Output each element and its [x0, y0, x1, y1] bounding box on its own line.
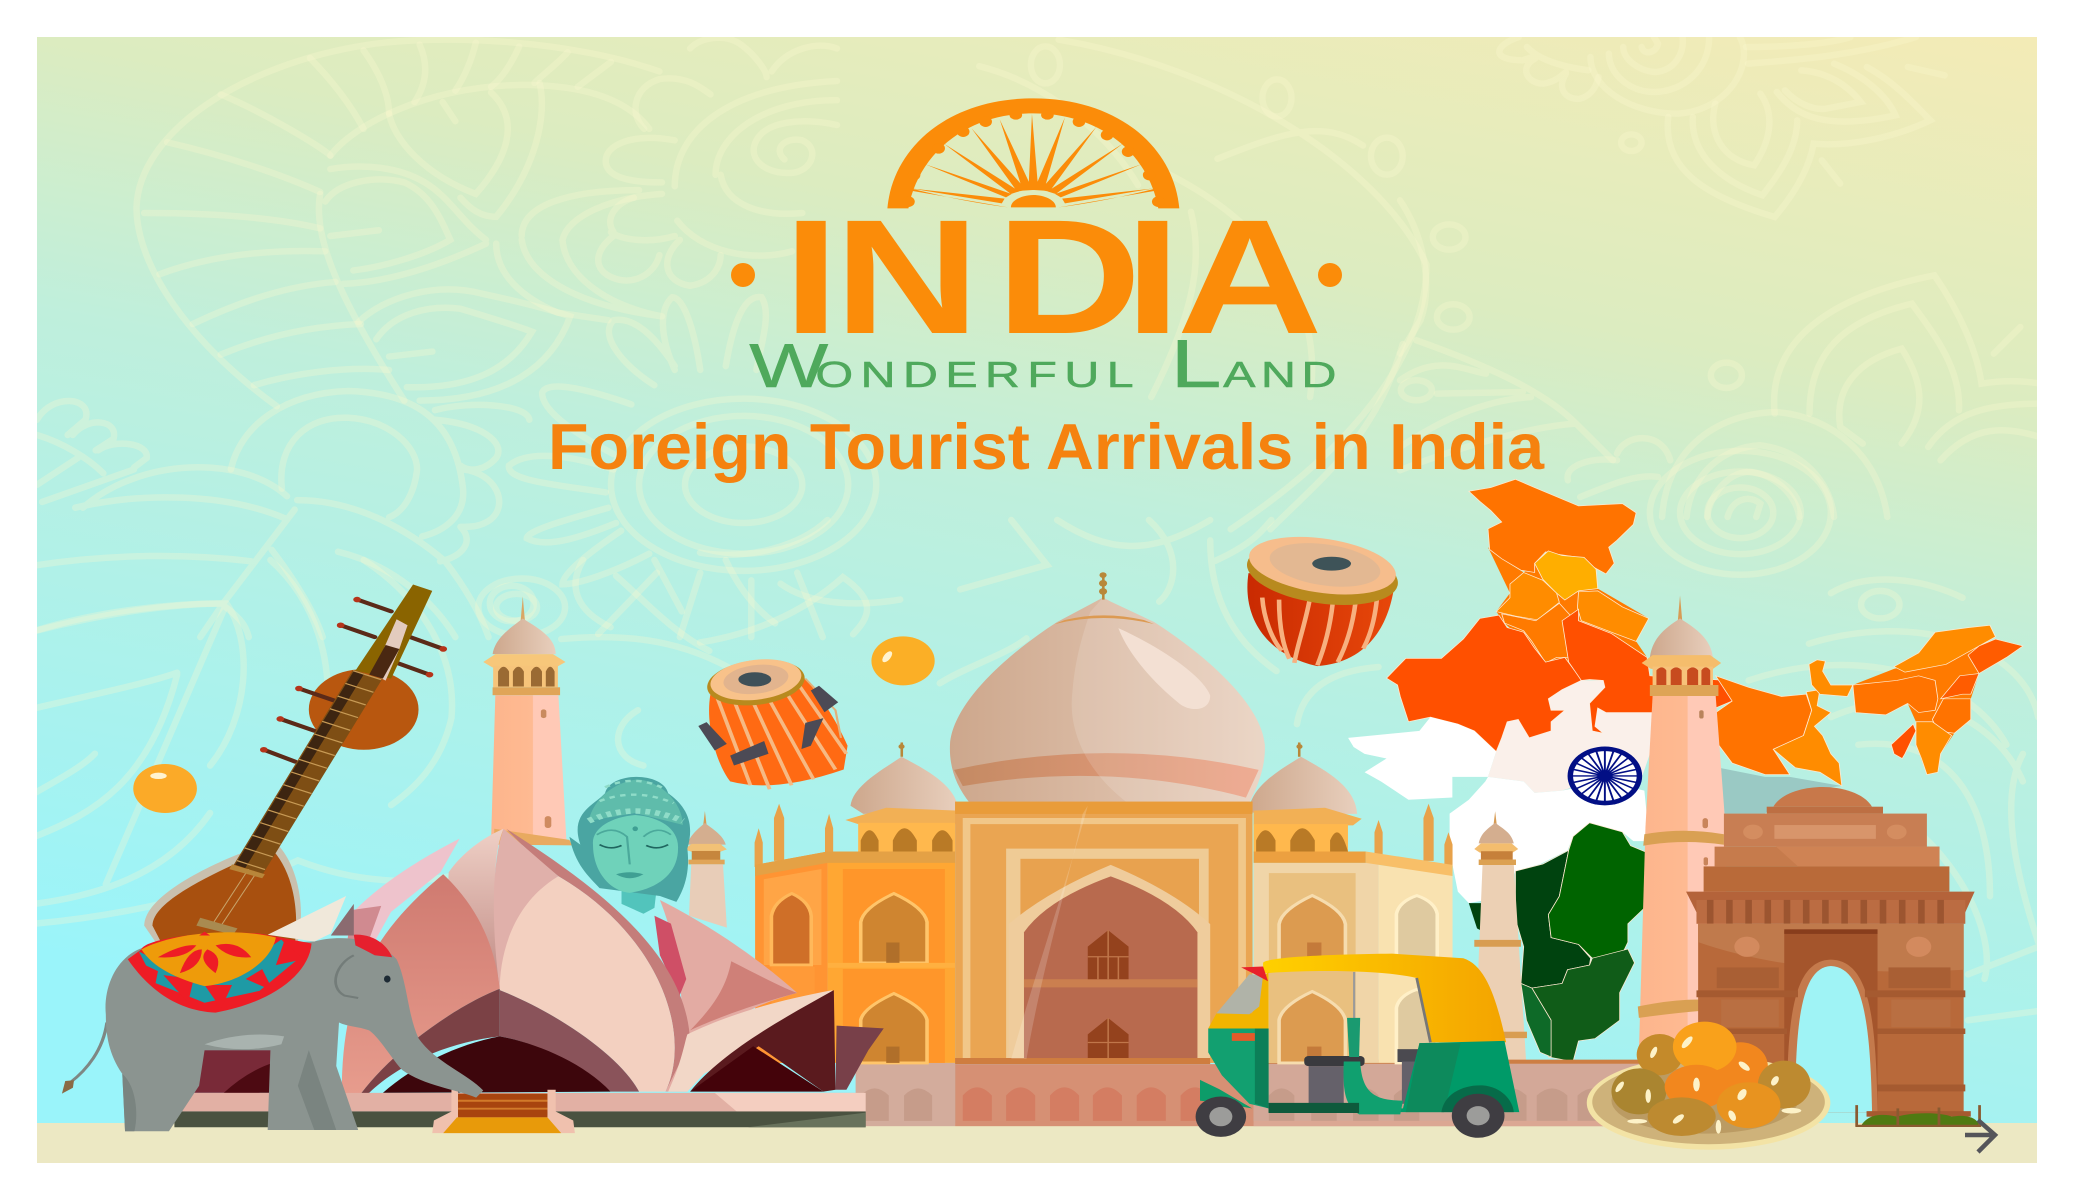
gate: main body [1696, 924, 1965, 1112]
lotus: stairway [432, 1090, 575, 1133]
Taj: main dome [950, 572, 1265, 804]
sweet ball left [133, 764, 197, 813]
left bowl: sitar [144, 585, 443, 941]
sitar: headstock [355, 585, 432, 681]
logo: tagline: ONDERFUL [815, 355, 1141, 395]
Taj: right small dome [1248, 742, 1362, 853]
mandala: top left [37, 38, 876, 637]
rickshaw: canopy [1263, 954, 1506, 1042]
small minaret behind lotus [684, 811, 727, 928]
lotus: pink inner [654, 916, 686, 997]
lotus: left hidden hall [194, 1050, 276, 1093]
flag chakra on map [1568, 747, 1642, 805]
logo: INDIA wordmark: INDIA [783, 186, 1323, 368]
elephant: ear and eye [336, 955, 391, 998]
Taj: left small dome [845, 742, 959, 852]
laddus [1611, 1022, 1811, 1136]
sitar: upper gourd [309, 669, 419, 750]
elephant: belly highlight [205, 1035, 284, 1049]
gate: base and grass [1856, 1105, 1981, 1127]
elephant: body [105, 938, 483, 1131]
logo: right dot [1318, 263, 1342, 287]
logo: chakra arch [887, 98, 1179, 208]
logo: tagline: L [1170, 326, 1221, 402]
map: northern states [1469, 479, 1649, 663]
map: shadow behind gate [1718, 768, 1842, 814]
almonds [1614, 1035, 1801, 1134]
lotus: left dark arch [224, 1062, 281, 1093]
rickshaw: windscreen [1208, 966, 1430, 1042]
Taj Mahal [755, 572, 1662, 1126]
title: Foreign Tourist Arrivals in India [548, 410, 1545, 483]
mandala: top centre [1116, 106, 1430, 532]
lotus: central arch [361, 989, 639, 1094]
logo: left dot [731, 263, 755, 287]
Lotus Temple [174, 829, 884, 1133]
elephant: head decoration [354, 935, 392, 957]
gate: cornice and frieze [1686, 892, 1975, 924]
Taj: left wing [755, 851, 955, 1063]
map: Rajasthan and Uttar Pradesh [1387, 609, 1732, 752]
Taj: left wing minarets [755, 804, 833, 867]
middle sweet ball [871, 636, 935, 685]
Taj: side base walls [856, 1060, 1662, 1126]
plate [1587, 1056, 1830, 1150]
elephant: saddle cloth [128, 932, 312, 1013]
elephant: tail [62, 1023, 107, 1094]
auto rickshaw [1196, 954, 1519, 1138]
map: eastern states [1716, 625, 2023, 786]
Buddha head [569, 777, 690, 914]
lotus: right back petal [660, 900, 797, 1092]
map: central white band [1348, 680, 1655, 903]
mandala: top right [1400, 37, 2040, 517]
logo: tagline: AND [1223, 355, 1342, 395]
map of India [1348, 479, 2023, 1062]
logo: tagline: W [749, 331, 829, 400]
elephant: leg shading [122, 1050, 336, 1131]
rickshaw: rear wheel [1452, 1094, 1504, 1138]
lotus: far right petal [835, 1026, 884, 1090]
Taj: right wing [1254, 851, 1453, 1063]
large left minaret [483, 596, 572, 845]
Taj: right wing minarets [1374, 804, 1453, 867]
sitar: neck [196, 672, 368, 935]
map: southern green states [1469, 823, 1647, 1062]
elephant: back ornament triangle [268, 896, 346, 941]
arrow icon [1965, 1120, 1995, 1152]
lotus: plinth [174, 1093, 866, 1127]
rickshaw: green body [1200, 1028, 1519, 1114]
rickshaw: front wheel [1196, 1096, 1246, 1137]
ground strip [37, 1123, 2037, 1163]
lotus: right arch [668, 990, 835, 1092]
Taj: central base wall [955, 1064, 1254, 1126]
Taj: central iwan [955, 802, 1253, 1064]
mandala: bottom left [35, 560, 900, 924]
lotus: right back petal shade [690, 961, 797, 1030]
small minaret behind rickshaw [1474, 811, 1527, 1066]
mandala: centre [700, 520, 1379, 724]
sitar: pegs [264, 600, 443, 762]
right tabla drum [1240, 528, 1405, 666]
large right minaret [1638, 595, 1727, 1052]
elephant [62, 896, 483, 1131]
India Gate [1686, 787, 1981, 1127]
map: backing for northern and north-eastern regions [1488, 547, 1979, 775]
lotus: back petals [339, 829, 690, 1092]
gate: dome and upper tiers [1704, 787, 1949, 892]
mandala: bottom right [1650, 451, 2038, 1020]
lotus: left main petal [342, 874, 500, 1094]
plate of laddus [1587, 1022, 1830, 1150]
rickshaw: seats and handle [1304, 1018, 1421, 1105]
mandala background pattern [35, 37, 2040, 1020]
left tabla drum [698, 653, 848, 789]
lotus: centre petal [500, 876, 675, 1092]
elephant: back ornament shadow [331, 904, 354, 936]
sitar: main gourd [144, 843, 301, 941]
